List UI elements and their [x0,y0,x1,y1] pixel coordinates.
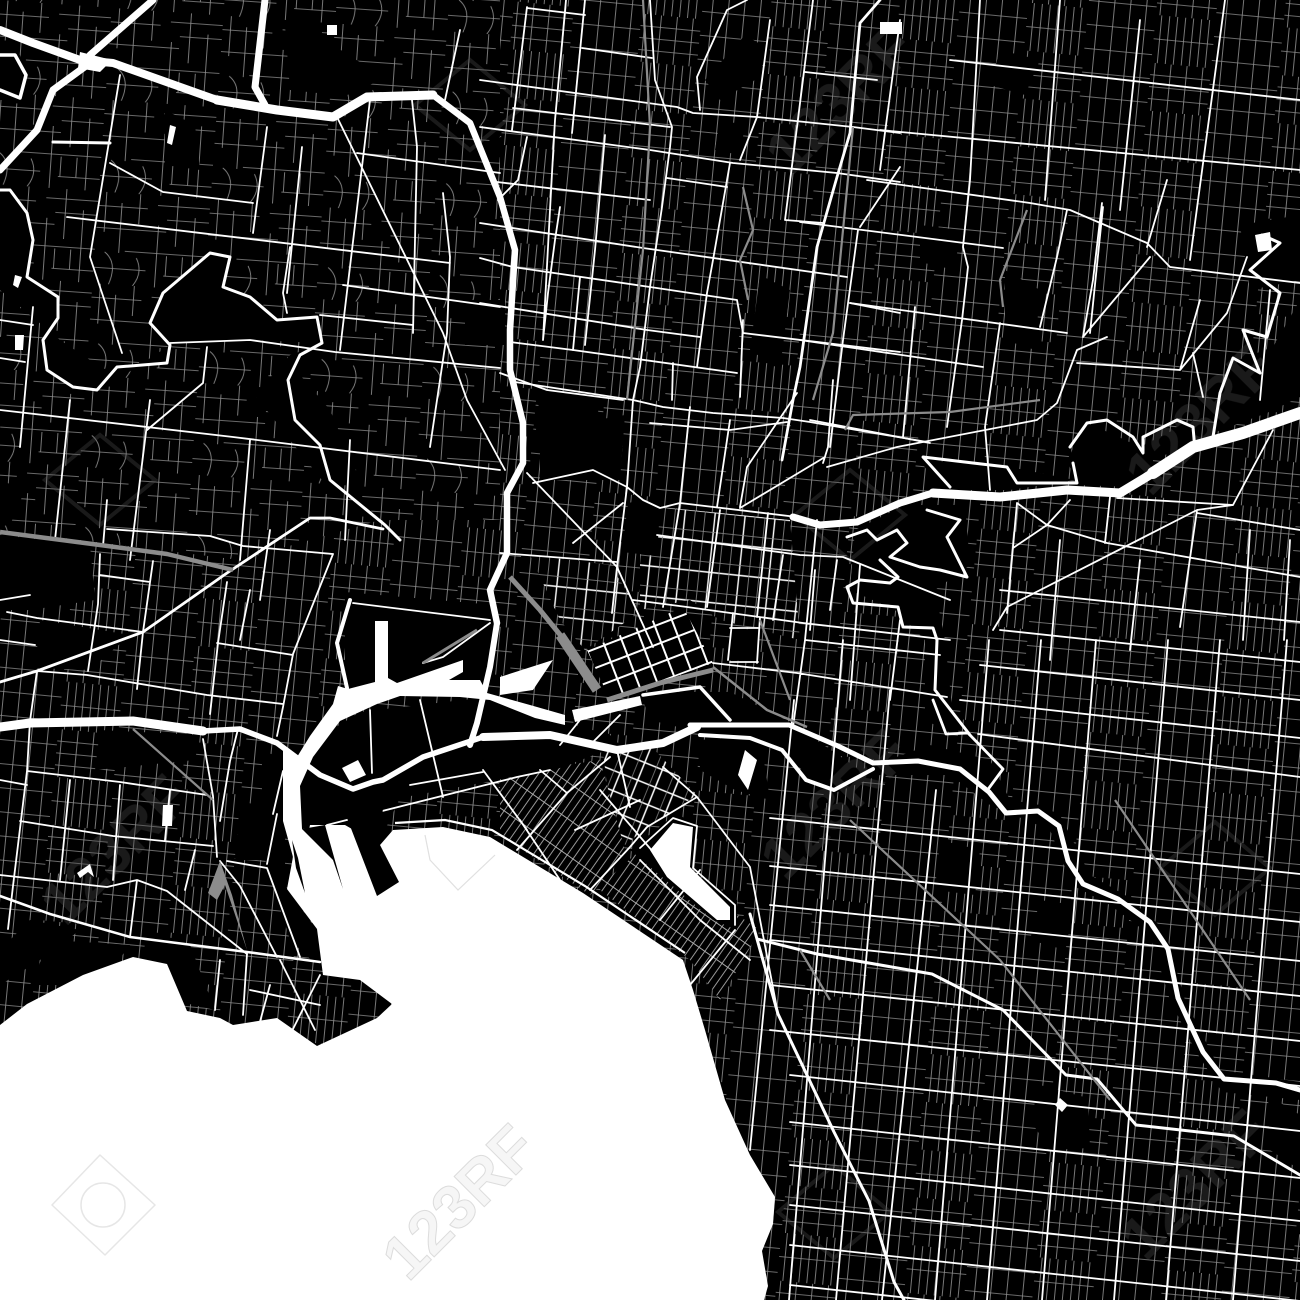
rail yard fan [208,861,247,950]
roads: south-east cross streets [770,818,1300,1300]
park: Kew [1067,420,1193,487]
park: Maribyrnong west strip [0,190,170,390]
roads: north-centre cross streets [480,8,900,400]
roads: west [0,518,383,682]
rail: north and east lines [133,0,1250,1100]
watermark: stamp icon on bay [52,1155,155,1255]
park: right margin [935,840,1300,1170]
park: east Yarra [1213,300,1300,433]
Yarra River and harbour [283,621,565,889]
Yarra and Monash corridor [690,725,1300,1090]
rail: city yards lower [560,635,597,690]
watermark: dark 123RF over land: 123RF [27,762,202,937]
river: Yarra lower bends [847,560,970,735]
park: river flats [255,345,360,490]
freeway: West Gate east [483,727,697,750]
park: river corridor [640,692,1300,1100]
watermark: dark 123RF over land: 123RF [752,12,927,187]
river: Yarra lower branch [700,735,873,790]
dock: Webb [347,807,399,896]
park: west blocks [0,480,270,985]
park: Fawkner Park [700,735,770,800]
freeways [0,0,1300,789]
freeway: Bolte [470,623,497,745]
park: inner blocks [165,35,1040,662]
port: west bank [262,750,322,970]
port: industrial land [345,592,495,690]
landmark: Station Pier [473,838,492,878]
rail: east line [713,667,807,727]
roads: north-west [0,30,505,560]
river: east bends [1213,235,1280,437]
river: Kew lower bend [923,457,1077,487]
river: Yarra south bends [847,510,967,577]
road: coastal west [0,896,320,962]
rail: port curve [423,630,477,663]
park: Kew south flat [920,460,1075,490]
docks [292,807,399,896]
roads: diagonals south-east [750,914,1300,1300]
roads: south-east verticals [750,640,1287,1300]
freeway: Western ring [0,63,90,170]
roads: north-centre verticals [498,0,900,400]
park: Maribyrnong basin [150,253,322,343]
freeway: north spur [255,0,265,105]
Albert Park Lake [650,823,730,920]
freeway: north-east spur [90,0,153,55]
roads: north-east [800,0,1300,490]
roads: central north [500,380,950,727]
road: east ring to city [643,687,730,720]
roads: west grid [0,500,333,957]
river: Maribyrnong upper [0,190,400,540]
road: north connector [53,142,110,143]
watermark: 123RF on bay: 123RF [369,1112,550,1293]
road: west of port [337,600,350,688]
port: docklands [300,698,620,860]
freeway: Monash [690,725,1300,1090]
river: Kew bends [1070,420,1210,453]
watermark: dark 123RF over land: 123RF [1107,1097,1282,1272]
rail: city yards [510,577,570,647]
road: lake ring [640,818,735,925]
watermark: dark 123RF over land: 123RF [1112,332,1287,507]
roads: St Kilda [520,790,750,985]
watermark: stamp near Station Pier [425,835,495,890]
freeway: West Gate bridge [203,729,483,789]
roads: east [960,430,1300,777]
road: east connector [933,700,1003,788]
park: Albert Park surround [630,813,737,930]
watermark: dark 123RF over land: 123RF [747,717,922,892]
roads: docklands [327,603,778,1014]
roads: Williamstown [215,954,320,1040]
rail: flinders viaduct [607,670,713,700]
freeway: ring west [0,30,217,100]
coast road [395,820,685,953]
freeway: ring centre [217,95,433,117]
river: north-west loop [0,55,26,98]
Port Phillip Bay [0,825,775,1300]
dock: Williamstown spit [292,840,305,893]
park: north-west loop [0,55,27,100]
dock: Appleton sliver [302,825,343,889]
interchange: north-west [78,52,112,72]
freeway: Eastern middle [933,473,1153,497]
freeway: Eastern inner [793,493,933,525]
road: major north-south [782,0,880,460]
park: coastal west [0,920,215,1010]
freeway: West Gate west [0,721,203,731]
rail: west main [0,532,233,570]
freeway: Tullamarine [433,95,523,623]
rivers and creek outlines [0,55,1280,735]
park: Yarra bends [850,505,970,735]
park: south-east golf [1030,1085,1090,1150]
freeway: Eastern outer [1153,413,1300,473]
park: north-east corner [1240,215,1300,290]
Victoria Harbour and upper Yarra [500,660,642,722]
park: upper centre [285,15,385,96]
